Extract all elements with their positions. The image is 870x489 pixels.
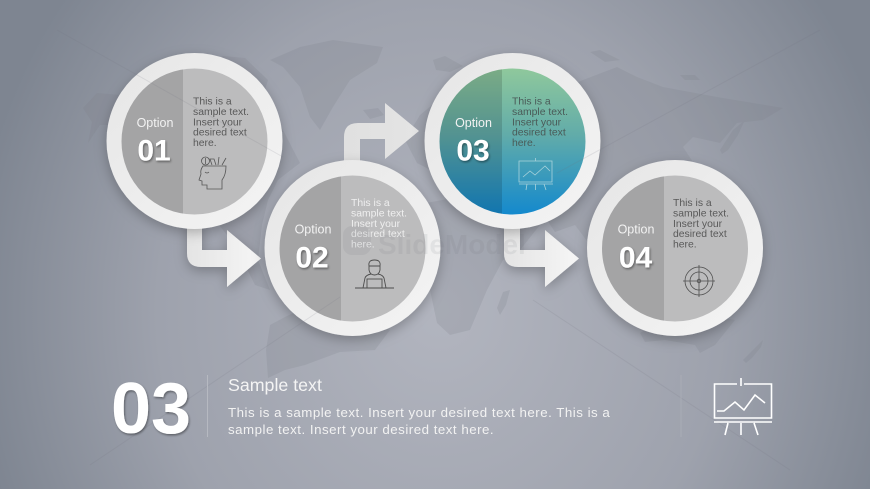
- body text: sample text.: [193, 107, 249, 118]
- panel: option 04: [587, 160, 763, 336]
- big number: 03: [111, 369, 191, 449]
- body text: This is a: [351, 198, 390, 209]
- number: 02: [295, 242, 329, 274]
- number: 03: [456, 134, 490, 168]
- arrow: 02 to 03: [344, 103, 419, 170]
- ring: [106, 53, 282, 229]
- map: svalbard: [433, 56, 463, 72]
- icon: target: [683, 265, 715, 297]
- icon: person at laptop: [355, 260, 394, 288]
- divider left: [206, 375, 208, 437]
- map: kamchatka: [720, 120, 745, 154]
- watermark: SlideModel: [378, 229, 526, 260]
- heading: Sample text: [228, 375, 322, 395]
- body text: sample text.: [673, 208, 729, 219]
- map: north america: [83, 56, 300, 290]
- body text: sample text.: [351, 208, 407, 219]
- body text: This is a: [673, 198, 712, 209]
- body text: This is a: [193, 96, 232, 108]
- map: australia: [640, 310, 735, 353]
- map: madagascar: [497, 290, 510, 315]
- world map: [83, 40, 783, 378]
- arrow: 01 to 02: [187, 220, 261, 287]
- circle fill: [120, 68, 270, 215]
- map: iceland: [363, 108, 384, 119]
- number: 04: [619, 242, 652, 274]
- label: Option: [295, 222, 331, 236]
- body text: Insert your: [673, 219, 723, 230]
- map: africa: [405, 195, 540, 335]
- panel: option 02: [264, 160, 440, 336]
- map: greenland: [270, 40, 383, 130]
- map: arctic islands: [590, 50, 700, 80]
- circle fill: [601, 175, 750, 322]
- panel: option 03: [424, 53, 600, 229]
- ring: [587, 160, 763, 336]
- body text: desired text: [512, 128, 566, 139]
- ring: [424, 53, 600, 229]
- map: europe and asia: [405, 67, 783, 245]
- circle fill: [278, 175, 428, 322]
- body text: desired text: [673, 229, 727, 240]
- map: south america: [266, 300, 390, 378]
- description: This is a sample text. Insert your desired text here. This is a: [228, 405, 610, 420]
- left shade: [438, 68, 502, 215]
- body text: here.: [351, 240, 375, 251]
- body text: desired text: [351, 229, 405, 240]
- icon: head with ideas: [199, 157, 226, 189]
- label: Option: [618, 222, 654, 236]
- label: Option: [455, 116, 492, 130]
- ring: [264, 160, 440, 336]
- label: Option: [137, 116, 173, 130]
- body text: sample text.: [512, 107, 568, 118]
- body text: here.: [512, 138, 536, 149]
- body text: Insert your: [351, 219, 401, 230]
- icon: presentation board: [519, 158, 553, 190]
- map: new zealand: [743, 340, 763, 363]
- body text: here.: [673, 240, 697, 251]
- body text: here.: [193, 138, 217, 149]
- decorative diagonal lines: [57, 30, 820, 470]
- icon: presentation board large: [714, 378, 772, 435]
- body text: desired text: [193, 128, 247, 139]
- panel: option 01: [106, 53, 282, 229]
- number: 01: [137, 134, 171, 168]
- arrow: 03 to 04: [504, 220, 579, 287]
- body text: Insert your: [193, 117, 243, 128]
- body text: This is a: [512, 96, 551, 108]
- divider right: [680, 375, 682, 437]
- description: sample text. Insert your desired text here.: [228, 422, 494, 437]
- circle fill: [440, 68, 586, 214]
- body text: Insert your: [512, 117, 562, 128]
